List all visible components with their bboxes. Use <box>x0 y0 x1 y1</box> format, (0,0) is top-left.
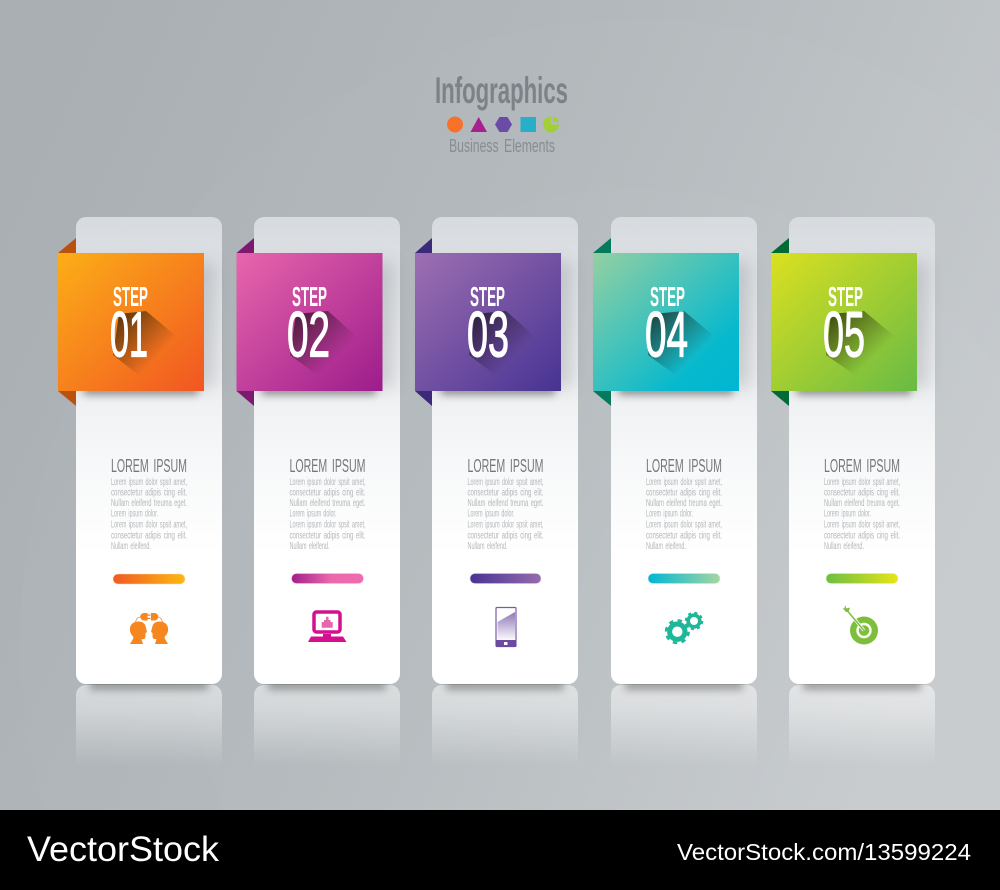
text block: Lorem ipsum dolor spsit amet, <box>824 520 900 530</box>
icon: purple hexagon <box>495 117 512 132</box>
text block <box>290 456 366 552</box>
text block <box>111 456 187 552</box>
panel: step 4 <box>593 217 757 785</box>
subtitle: Business Elements: Business Elements <box>449 136 555 156</box>
icon: magenta triangle <box>470 117 487 132</box>
card <box>789 217 935 684</box>
text block: consectetur adipis cing elit. <box>646 530 722 542</box>
long shadow <box>826 311 894 377</box>
fold top <box>236 238 254 253</box>
text block <box>824 456 900 552</box>
card shadow <box>446 680 564 690</box>
long shadow <box>113 311 176 377</box>
fold bottom <box>593 391 611 406</box>
text block: consectetur adipis cing elit. <box>646 488 722 498</box>
text block: consectetur adipis cing elit. <box>290 488 366 498</box>
panel: step 4: STEP <box>650 281 685 312</box>
text block: Nullam eleifend. <box>468 541 508 552</box>
text block: consectetur adipis cing elit. <box>824 530 900 542</box>
text block: Lorem ipsum dolor spsit amet, <box>646 520 722 530</box>
text block: LOREM IPSUM <box>290 456 366 476</box>
icon: target with arrow <box>842 605 878 644</box>
gradient bar <box>113 574 185 584</box>
panel: step 1 <box>58 217 222 785</box>
gradient bar <box>826 574 898 584</box>
reflection <box>76 685 222 785</box>
text block: Lorem ipsum dolor spsit amet, <box>468 520 544 530</box>
card shadow <box>268 680 386 690</box>
title: Infographics: Infographics <box>435 70 568 111</box>
text block: LOREM IPSUM <box>646 456 722 476</box>
card <box>432 217 578 684</box>
step square <box>415 253 561 391</box>
text block: consectetur adipis cing elit. <box>824 488 900 498</box>
icon: two heads with plug <box>130 613 168 644</box>
text block: Lorem ipsum dolor spsit amet, <box>824 477 900 488</box>
icon: gears <box>666 613 702 643</box>
bottom shadow <box>441 385 555 395</box>
long shadow <box>290 311 356 377</box>
footer bar <box>0 810 1000 890</box>
text block: Lorem ipsum dolor spsit amet, <box>111 477 187 488</box>
panel: step 3 <box>415 217 578 785</box>
text block: Lorem ipsum dolor. <box>468 508 514 520</box>
fold bottom <box>58 391 76 406</box>
card <box>611 217 757 684</box>
text block: consectetur adipis cing elit. <box>111 488 187 498</box>
fold top <box>58 238 76 253</box>
bottom shadow <box>84 385 198 395</box>
bottom shadow <box>797 385 911 395</box>
fold top <box>415 238 432 253</box>
bottom shadow <box>619 385 733 395</box>
step number: 04 <box>645 298 688 370</box>
step square <box>236 253 382 391</box>
text block: Lorem ipsum dolor. <box>824 508 871 520</box>
text block: Nullam eleifend. <box>290 541 330 552</box>
card <box>76 217 222 684</box>
icon: computer monitor <box>308 612 346 642</box>
panel: step 5 <box>771 217 935 785</box>
panel: step 1: STEP <box>113 281 148 312</box>
reflection <box>789 685 935 785</box>
icon: orange circle <box>447 116 463 132</box>
text block: Nullam eleifend. <box>646 541 686 552</box>
text block <box>468 456 544 552</box>
text block: Lorem ipsum dolor. <box>290 508 336 520</box>
icon: blue square <box>520 117 536 132</box>
text block: Nullam eleifend treuma eget. <box>824 498 900 509</box>
long shadow <box>648 311 714 377</box>
square shadow <box>248 262 394 388</box>
text block: consectetur adipis cing elit. <box>111 530 187 542</box>
square shadow <box>605 262 751 388</box>
text block: consectetur adipis cing elit. <box>468 530 544 542</box>
fold top <box>771 238 789 253</box>
text block: Lorem ipsum dolor. <box>111 508 158 520</box>
step square <box>771 253 917 391</box>
text block: consectetur adipis cing elit. <box>468 488 544 498</box>
panel: step 5: STEP <box>828 281 863 312</box>
text block: Nullam eleifend. <box>111 541 151 552</box>
step number: 03 <box>467 298 509 370</box>
card shadow <box>90 680 208 690</box>
text block: Nullam eleifend treuma eget. <box>290 498 366 509</box>
text block: consectetur adipis cing elit. <box>290 530 366 542</box>
reflection <box>432 685 578 785</box>
text block: Nullam eleifend treuma eget. <box>646 498 722 509</box>
square shadow <box>427 262 573 388</box>
reflection <box>254 685 400 785</box>
text block: Nullam eleifend. <box>824 541 864 552</box>
step square <box>58 253 204 391</box>
gradient bar <box>470 574 541 584</box>
icon: green pie <box>543 116 559 132</box>
text block: Lorem ipsum dolor. <box>646 508 693 520</box>
text block: LOREM IPSUM <box>824 456 900 476</box>
text block: Lorem ipsum dolor spsit amet, <box>111 520 187 530</box>
fold bottom <box>236 391 254 406</box>
fold top <box>593 238 611 253</box>
title block <box>435 70 568 156</box>
card <box>254 217 400 684</box>
text block: Nullam eleifend treuma eget. <box>111 498 187 509</box>
square shadow <box>783 262 929 388</box>
square shadow <box>70 262 216 388</box>
step number: 05 <box>823 298 865 370</box>
watermark url: VectorStock.com/13599224 <box>677 839 971 865</box>
text block: Lorem ipsum dolor spsit amet, <box>290 520 366 530</box>
panel: step 2 <box>236 217 400 785</box>
step square <box>593 253 739 391</box>
card shadow <box>625 680 743 690</box>
watermark brand: VectorStock <box>27 830 220 869</box>
text block: Lorem ipsum dolor spsit amet, <box>646 477 722 488</box>
text block: Nullam eleifend treuma eget. <box>468 498 544 509</box>
gradient bar <box>292 574 364 584</box>
text block <box>646 456 722 552</box>
fold bottom <box>415 391 432 406</box>
text block: Lorem ipsum dolor spsit amet, <box>290 477 366 488</box>
fold bottom <box>771 391 789 406</box>
panel: step 3: STEP <box>470 281 505 312</box>
text block: LOREM IPSUM <box>111 456 187 476</box>
card shadow <box>803 680 921 690</box>
step number: 01 <box>110 298 148 370</box>
icon: smartphone <box>496 608 516 647</box>
text block: Lorem ipsum dolor spsit amet, <box>468 477 544 488</box>
bottom shadow <box>262 385 376 395</box>
step number: 02 <box>287 298 330 370</box>
long shadow <box>469 311 534 377</box>
text block: LOREM IPSUM <box>468 456 544 476</box>
gradient bar <box>648 574 720 584</box>
panel: step 2: STEP <box>292 281 327 312</box>
reflection <box>611 685 757 785</box>
